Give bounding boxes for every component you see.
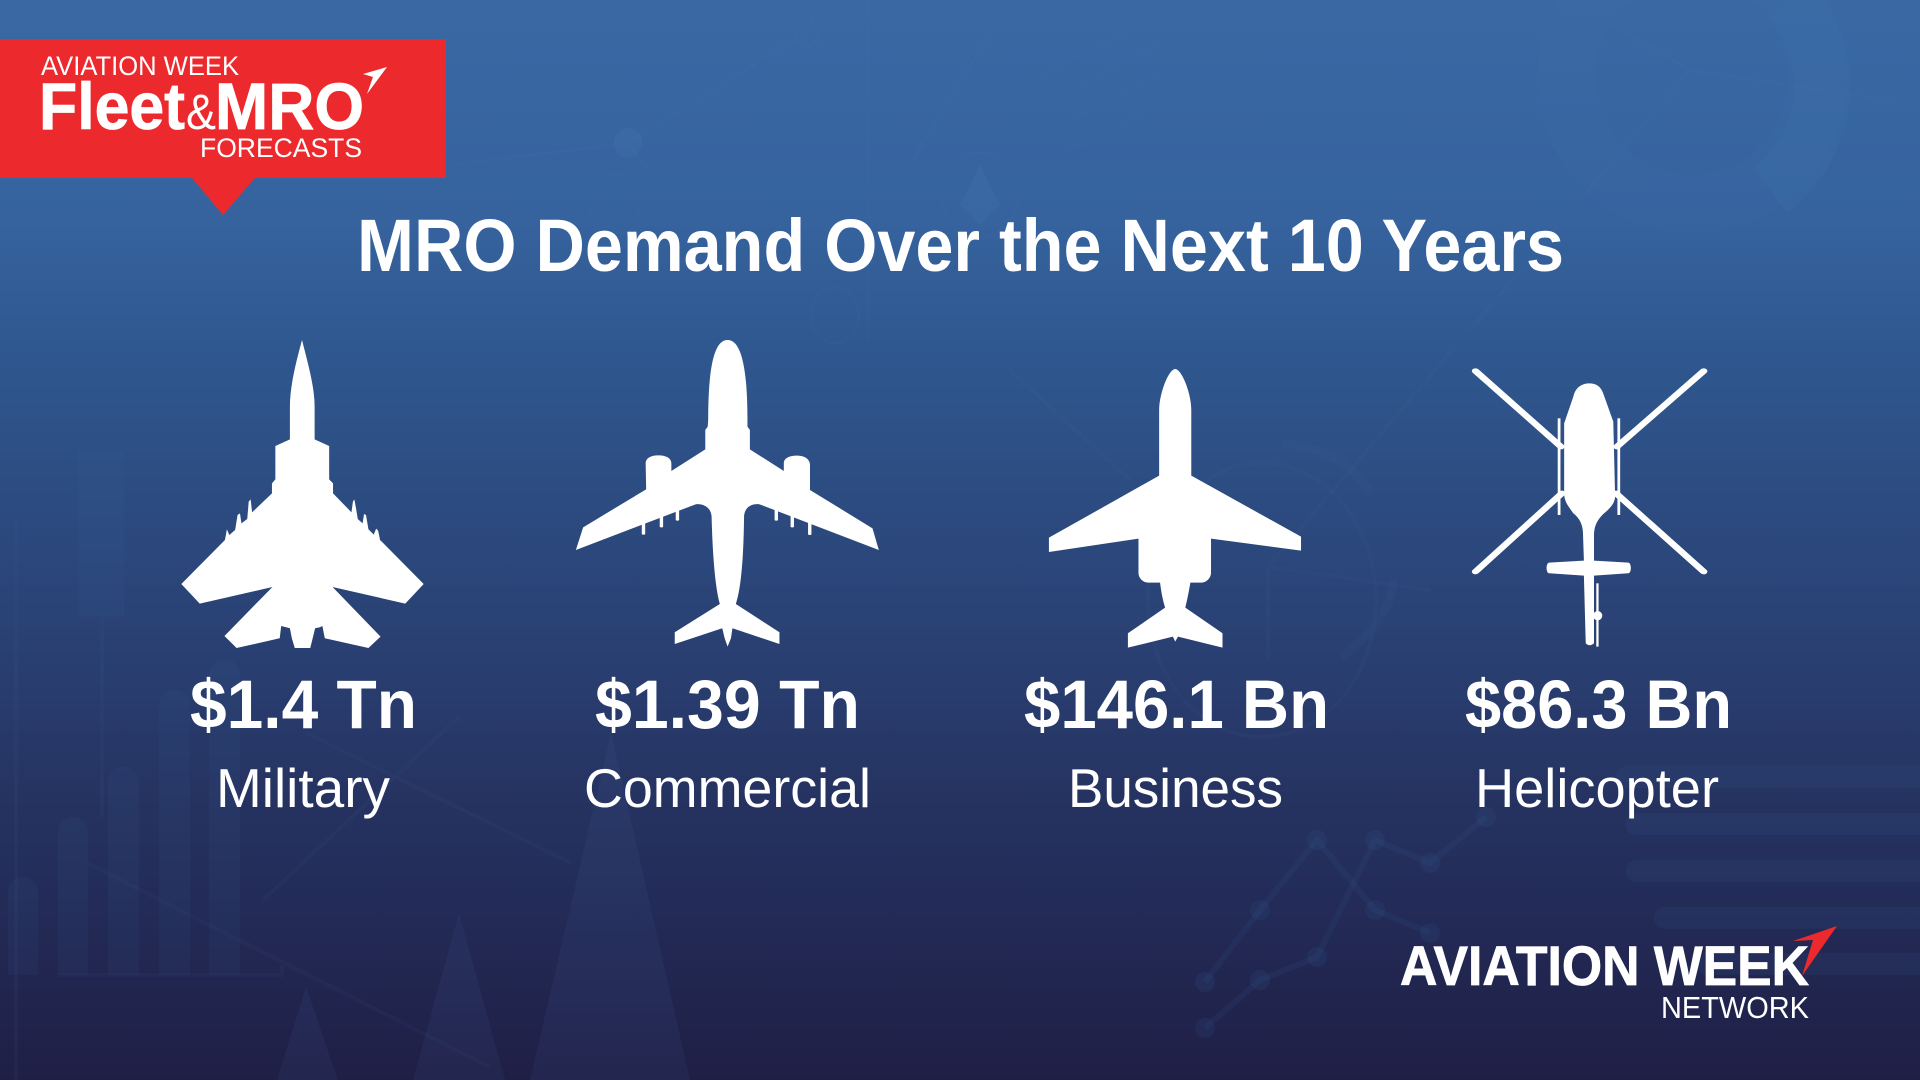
item: commercial: [576, 340, 879, 819]
logo text: Aviation Week: AVIATION WEEK: [41, 51, 239, 81]
label: Military: [216, 757, 390, 819]
item: business: [1024, 369, 1329, 819]
icon: helicopter: [1476, 371, 1704, 647]
icon: business jet: [1049, 369, 1301, 648]
title: MRO Demand Over the Next 10 Years: [357, 204, 1564, 287]
label: Business: [1068, 757, 1283, 819]
value: $1.4 Tn: [190, 666, 417, 743]
icon: fighter jet: [181, 340, 424, 648]
logo text: Network: NETWORK: [1661, 991, 1809, 1025]
label: Helicopter: [1475, 757, 1719, 819]
logo text: Forecasts: FORECASTS: [200, 133, 362, 163]
logo: Aviation Week Fleet & MRO Forecasts: [0, 39, 446, 215]
icon: red arrow: [1793, 926, 1837, 976]
logo text: Aviation Week: AVIATION WEEK: [1400, 934, 1809, 997]
icon: white arrow: [363, 67, 387, 94]
label: Commercial: [584, 757, 871, 819]
logo text: MRO: MRO: [215, 69, 364, 143]
icon: airliner: [576, 340, 879, 647]
value: $1.39 Tn: [595, 666, 860, 743]
logo text: Fleet: Fleet: [39, 69, 185, 143]
red callout tag: [0, 39, 446, 215]
logo text: ampersand: &: [186, 84, 216, 140]
item: helicopter: [1465, 371, 1732, 819]
item: military: [181, 340, 424, 819]
value: $86.3 Bn: [1465, 666, 1732, 743]
value: $146.1 Bn: [1024, 666, 1329, 743]
logo: Aviation Week Network: [1400, 926, 1837, 1025]
